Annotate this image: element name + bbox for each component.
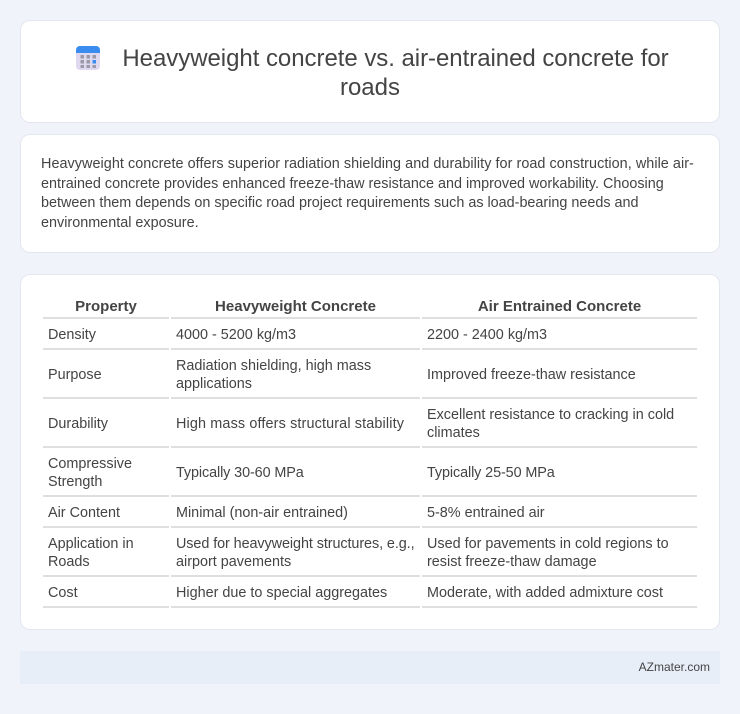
- panel: comparison table: [20, 274, 720, 630]
- row: cost: Cost: [48, 585, 78, 601]
- footer bar: [20, 651, 720, 684]
- row: compressive strength: Compressive: [48, 456, 132, 472]
- title: roads: [340, 74, 400, 101]
- row: cost: [48, 585, 663, 601]
- row: density: [48, 327, 547, 343]
- table header: [75, 298, 641, 315]
- row: compressive strength: Typically 25-50 MPa: [427, 465, 555, 481]
- row: air content: Air Content: [48, 505, 120, 521]
- panel: introduction: [20, 134, 720, 253]
- row: air content: Minimal (non-air entrained): [176, 505, 348, 521]
- row: application in roads: Used for heavyweight structures, e.g.,: [176, 536, 415, 552]
- row: durability: High mass offers structural stability: [176, 416, 404, 432]
- table header: Air Entrained Concrete: [478, 298, 641, 315]
- row: application in roads: resist freeze-thaw damage: [427, 554, 597, 570]
- panel: header: [20, 20, 720, 123]
- row: density: Density: [48, 327, 96, 343]
- table header: Heavyweight Concrete: [215, 298, 376, 315]
- row: air content: [48, 505, 545, 521]
- row: compressive strength: Strength: [48, 474, 102, 490]
- row: application in roads: Roads: [48, 554, 90, 570]
- row: density: 2200 - 2400 kg/m3: [427, 327, 547, 343]
- row: purpose: applications: [176, 376, 252, 392]
- row: air content: 5-8% entrained air: [427, 505, 545, 521]
- row: cost: Moderate, with added admixture cost: [427, 585, 663, 601]
- row: compressive strength: [48, 456, 555, 490]
- row: purpose: Purpose: [48, 367, 102, 383]
- row: compressive strength: Typically 30-60 MPa: [176, 465, 304, 481]
- table header: Property: [75, 298, 137, 315]
- row: durability: Durability: [48, 416, 108, 432]
- row: purpose: [48, 358, 636, 392]
- row: durability: Excellent resistance to cracking in cold: [427, 407, 674, 423]
- intro text: environmental exposure.: [41, 214, 199, 230]
- row: density: 4000 - 5200 kg/m3: [176, 327, 296, 343]
- icon: calendar: [76, 46, 100, 70]
- intro text: entrained concrete provides enhanced freeze-thaw resistance and improved workability. Choosing: [41, 176, 664, 192]
- row: purpose: Radiation shielding, high mass: [176, 358, 371, 374]
- title: Heavyweight concrete vs. air-entrained concrete for: [122, 45, 669, 72]
- row: purpose: Improved freeze-thaw resistance: [427, 367, 636, 383]
- row: application in roads: airport pavements: [176, 554, 291, 570]
- row: application in roads: Used for pavements in cold regions to: [427, 536, 669, 552]
- row: cost: Higher due to special aggregates: [176, 585, 387, 601]
- row: application in roads: [48, 536, 669, 570]
- intro text: between them depends on specific road project requirements such as load-bearing needs and: [41, 195, 638, 211]
- row: durability: climates: [427, 425, 480, 441]
- row: application in roads: Application in: [48, 536, 134, 552]
- footer credit: AZmater.com: [639, 660, 710, 674]
- row: durability: [48, 407, 674, 441]
- intro text: [41, 156, 694, 230]
- intro text: Heavyweight concrete offers superior radiation shielding and durability for road construction, while air-: [41, 156, 694, 172]
- title: [122, 45, 669, 101]
